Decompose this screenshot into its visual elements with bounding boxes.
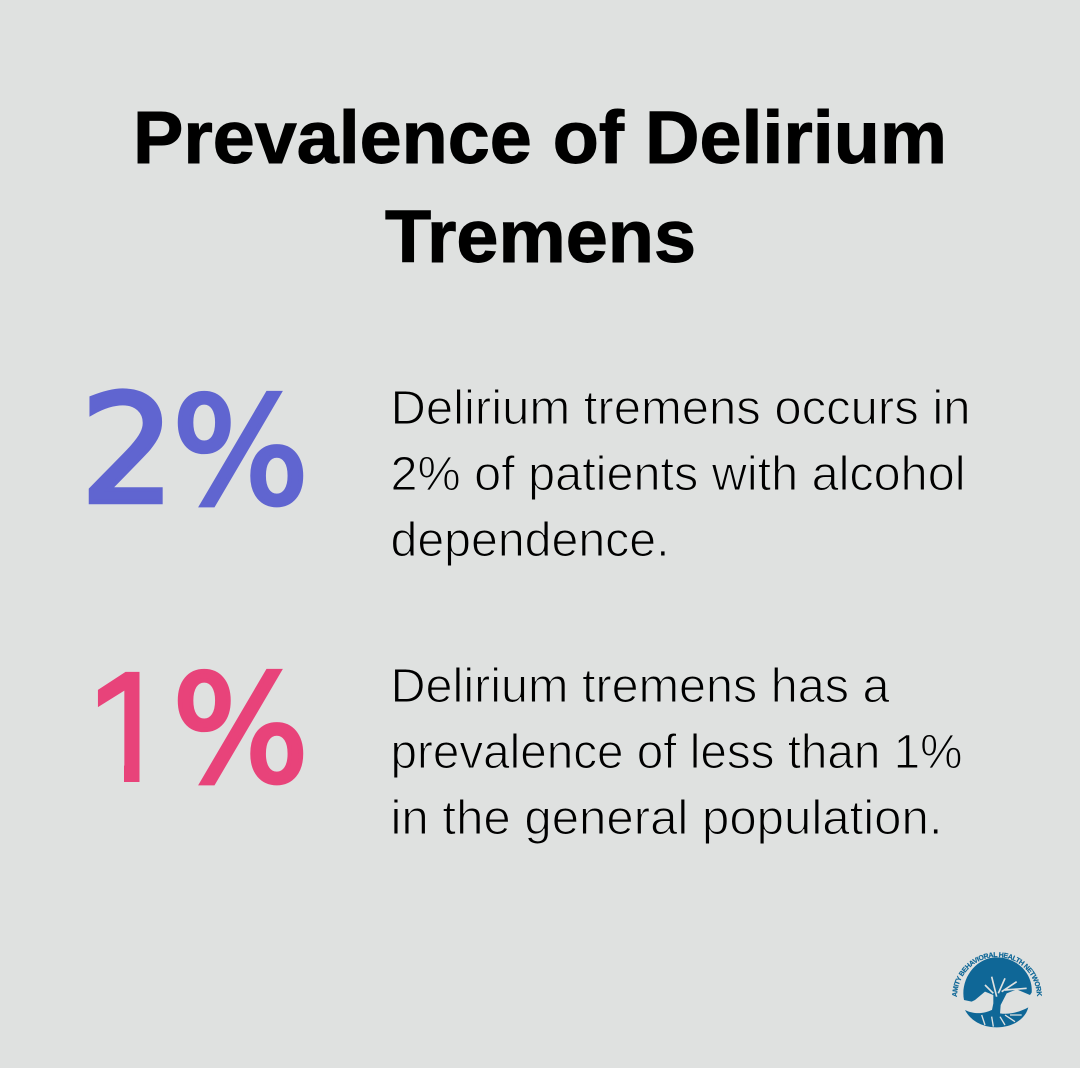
statistic: 1%	[98, 668, 304, 786]
title	[133, 96, 947, 278]
branches	[985, 977, 1027, 997]
text block: 1% description	[390, 660, 962, 845]
statistic: 2%: 2	[80, 364, 175, 538]
icon: Amity Behavioral Health Network logo	[952, 952, 1042, 1028]
text block: 2% description: dependence.	[390, 514, 670, 567]
text block: 2% description: Delirium tremens occurs in	[390, 382, 970, 435]
text block: 2% description: 2% of patients with alcohol	[390, 448, 966, 501]
text block: 1% description: Delirium tremens has a	[390, 660, 890, 713]
icon: Amity Behavioral Health Network logo: AMITY BEHAVIORAL HEALTH NETWORK	[952, 952, 1042, 997]
statistic: 1%: 1	[87, 637, 176, 816]
canopy and trunk	[963, 957, 1032, 1014]
statistic: 2%: %	[172, 366, 309, 538]
root lines	[982, 1015, 1022, 1027]
text block: 1% description: prevalence of less than 1%	[390, 726, 962, 779]
text block: 2% description	[390, 382, 970, 567]
statistic: 1%: %	[172, 644, 309, 816]
text block: 1% description: in the general population.	[390, 792, 942, 845]
statistic: 2%	[80, 364, 309, 538]
title: Tremens	[385, 195, 696, 278]
roots bowl	[965, 1007, 1028, 1027]
title: Prevalence of Delirium	[133, 96, 947, 179]
tree	[963, 957, 1032, 1027]
